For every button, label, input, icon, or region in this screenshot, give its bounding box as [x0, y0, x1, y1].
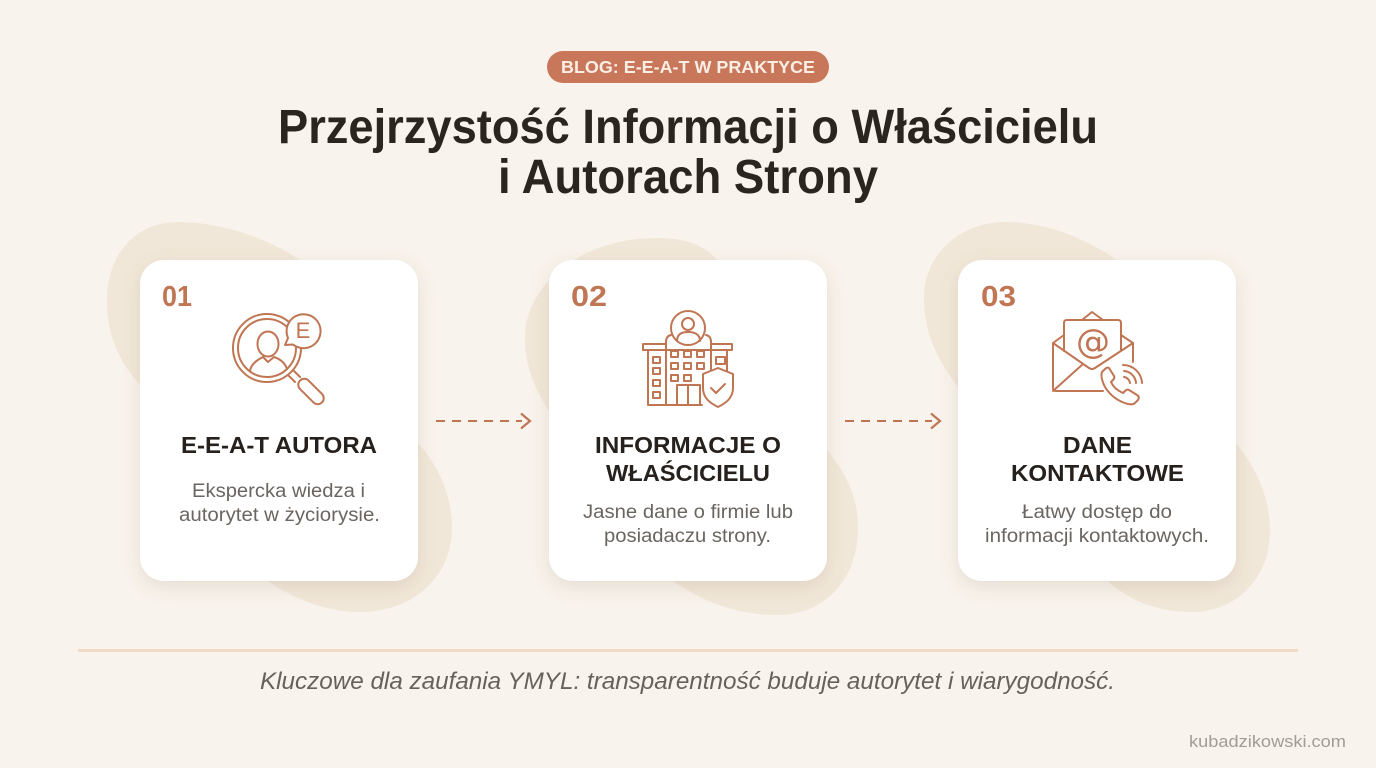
step number 01: 01	[162, 281, 192, 313]
watermark: kubadzikowski.com	[1189, 732, 1346, 751]
description 1	[179, 481, 380, 526]
description 1: Ekspercka wiedza i	[192, 481, 365, 502]
card 1	[140, 260, 418, 581]
heading: Dane kontaktowe	[1011, 432, 1184, 486]
description 3	[985, 502, 1209, 547]
heading: Dane kontaktowe: KONTAKTOWE	[1011, 460, 1184, 486]
heading: Informacje o wlascicielu	[595, 432, 781, 486]
description 3: informacji kontaktowych.	[985, 526, 1209, 547]
panel: step 3 contact	[924, 222, 1270, 612]
step number 02: 02	[571, 281, 607, 313]
description 2	[583, 502, 793, 547]
icon: building with person and shield	[643, 311, 733, 407]
title: Przejrzystość Informacji o Właścicielu	[278, 101, 1098, 154]
icon: magnifier with person and E bubble: E	[296, 318, 310, 343]
step number 03: 03	[981, 281, 1016, 313]
background blob 2	[525, 238, 858, 615]
badge: blog category	[547, 51, 829, 83]
title	[278, 101, 1098, 204]
heading: Informacje o wlascicielu: WŁAŚCICIELU	[606, 459, 770, 486]
heading: E-E-A-T Autora: E-E-A-T AUTORA	[181, 432, 377, 458]
title: i Autorach Strony	[498, 151, 878, 204]
icon: envelope with at sign and phone	[1053, 312, 1142, 404]
arrow: step 1 to 2	[436, 414, 530, 428]
footer statement: Kluczowe dla zaufania YMYL: transparentność buduje autorytet i wiarygodność.	[260, 668, 1115, 695]
card 3	[958, 260, 1236, 581]
background blob 1	[107, 222, 452, 612]
description 1: autorytet w życiorysie.	[179, 505, 380, 526]
heading: Dane kontaktowe: DANE	[1063, 432, 1132, 458]
icon: envelope with at sign and phone: @	[1076, 322, 1110, 362]
description 2: posiadaczu strony.	[604, 526, 771, 547]
heading: Informacje o wlascicielu: INFORMACJE O	[595, 432, 781, 458]
description 3: Łatwy dostęp do	[1022, 502, 1172, 523]
icon: magnifier with person and E bubble	[233, 314, 326, 407]
background blob 3	[924, 222, 1270, 612]
card 2	[549, 260, 827, 581]
arrow: step 2 to 3	[845, 414, 940, 428]
panel: step 2 owner	[525, 238, 858, 615]
panel: step 1 author	[107, 222, 452, 612]
badge: blog category: BLOG: E-E-A-T W PRAKTYCE	[561, 57, 815, 77]
description 2: Jasne dane o firmie lub	[583, 502, 793, 523]
